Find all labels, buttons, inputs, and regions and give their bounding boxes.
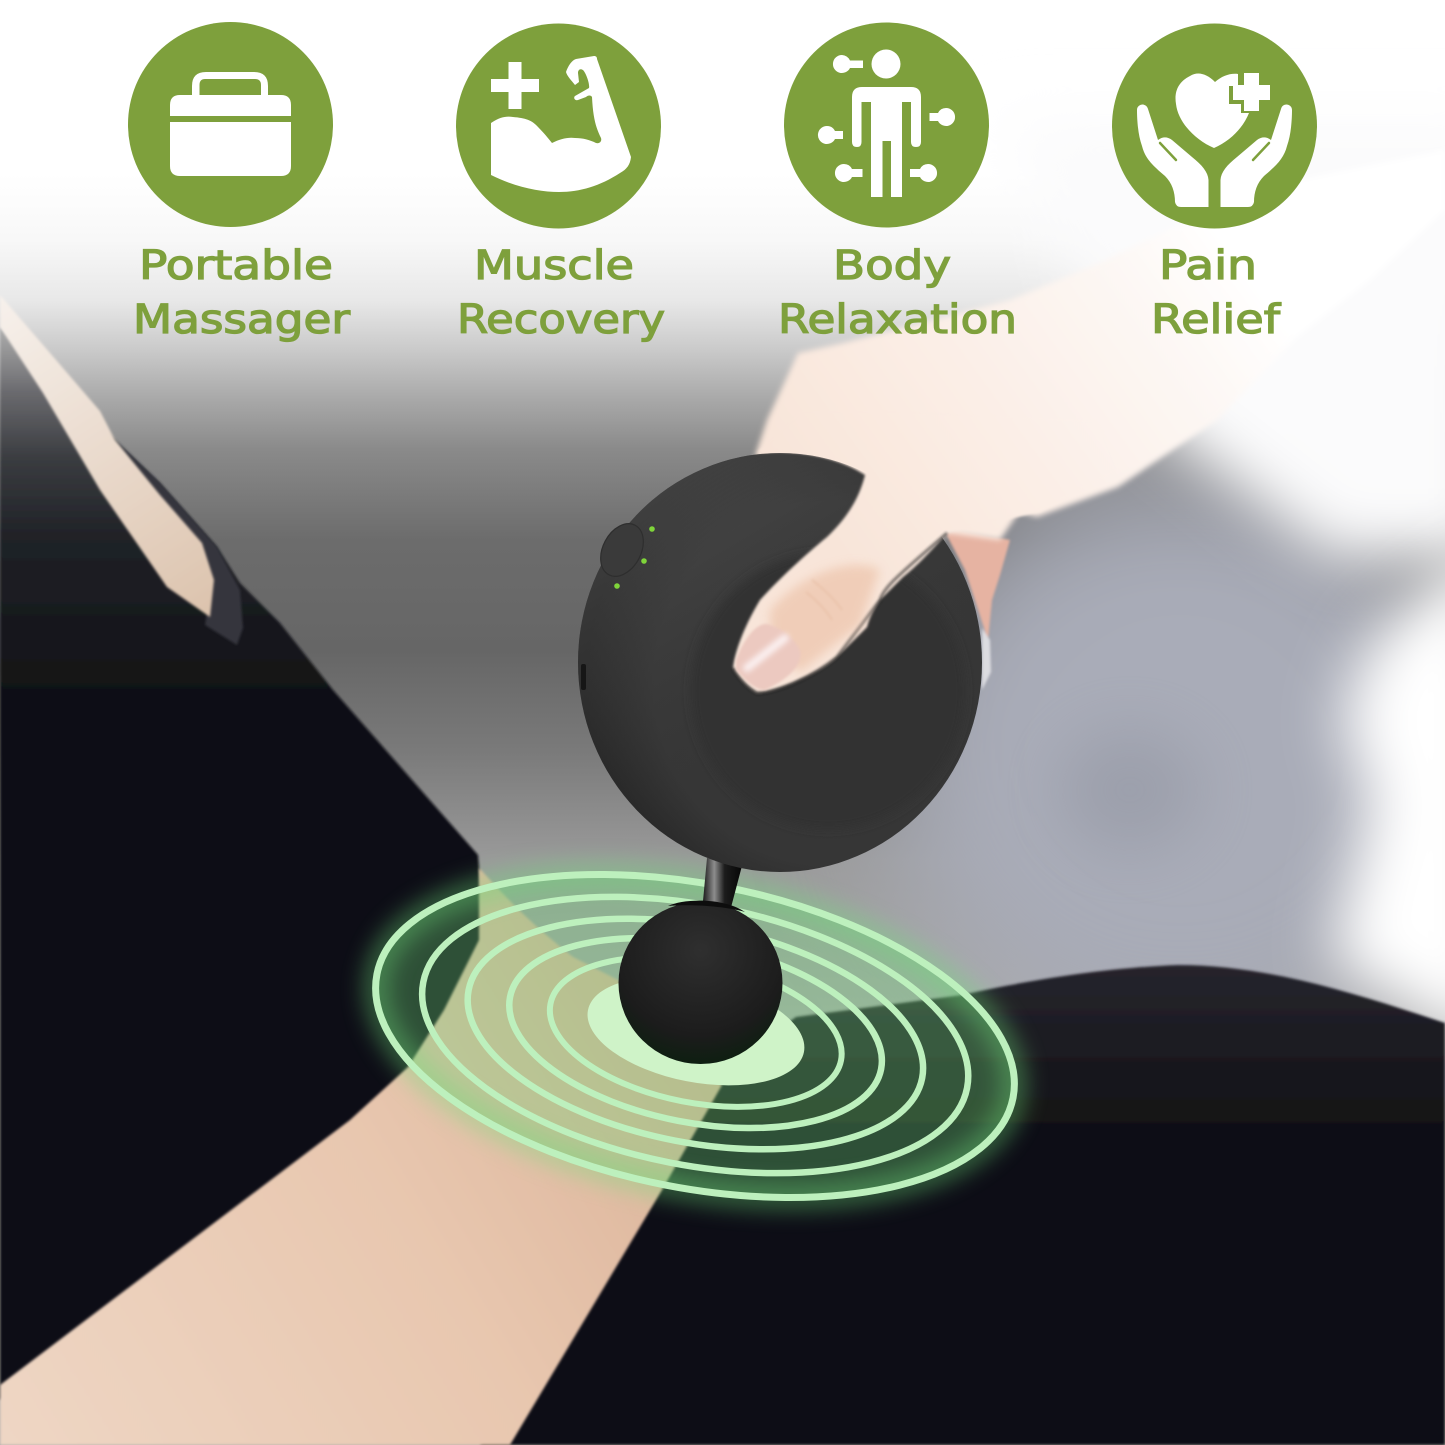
LED 3 bbox=[614, 583, 620, 589]
ring 3 bbox=[448, 883, 943, 1185]
hand back fading into white bbox=[756, 150, 1445, 600]
label: Portable Massager: Massager bbox=[133, 297, 351, 343]
massage ball head bbox=[618, 901, 782, 1064]
left hand crease bbox=[1160, 143, 1176, 160]
label: Body Relaxation bbox=[778, 243, 1017, 343]
inner darker disc bbox=[691, 553, 965, 829]
forearm bbox=[0, 868, 722, 1445]
thumb and palm over the device bbox=[733, 410, 1120, 693]
massager shaft bbox=[702, 858, 743, 915]
plus bbox=[1233, 73, 1270, 111]
tinted ring interior bbox=[348, 825, 1042, 1247]
LED 2 bbox=[641, 558, 647, 564]
black shirt on the left bbox=[0, 327, 490, 1400]
thumb shadow bbox=[733, 533, 947, 693]
sleeve fold bbox=[115, 440, 243, 645]
node right bbox=[930, 108, 955, 126]
nail highlight bbox=[747, 638, 785, 668]
label: Body Relaxation: Relaxation bbox=[778, 297, 1017, 343]
thumbnail bbox=[736, 624, 800, 690]
ring 5 bbox=[537, 935, 854, 1130]
black trousers lower right bbox=[480, 965, 1445, 1445]
thumb skin tone bbox=[770, 565, 880, 672]
left hand bbox=[1137, 105, 1208, 207]
label: Portable Massager bbox=[133, 243, 351, 343]
label: Body Relaxation: Body bbox=[833, 243, 951, 289]
label: Pain Relief: Pain bbox=[1159, 243, 1257, 289]
LED 1 bbox=[649, 526, 655, 532]
massager body bbox=[578, 453, 982, 872]
side slot bbox=[581, 664, 586, 690]
label: Muscle Recovery: Recovery bbox=[457, 297, 665, 343]
right hand bbox=[1220, 105, 1292, 207]
thumb crease bbox=[806, 580, 842, 620]
ring 4 bbox=[493, 909, 898, 1157]
right hand crease bbox=[1253, 143, 1269, 160]
heart bbox=[1176, 74, 1249, 148]
power button bbox=[592, 516, 652, 584]
icon: pain relief heart in hands bbox=[1112, 24, 1317, 228]
node left bbox=[818, 126, 843, 144]
icon: muscle recovery arm bbox=[456, 24, 661, 228]
label: Muscle Recovery bbox=[457, 243, 665, 343]
label: Muscle Recovery: Muscle bbox=[474, 243, 634, 289]
shoulder skin strip bbox=[0, 295, 214, 617]
ring glow bbox=[348, 825, 1042, 1247]
icon: portable massager case bbox=[128, 22, 333, 227]
label: Pain Relief: Relief bbox=[1151, 297, 1281, 343]
node bottom left bbox=[835, 164, 862, 182]
vibration rings bbox=[348, 825, 1042, 1247]
label: Portable Massager: Portable bbox=[139, 243, 333, 289]
node bottom right bbox=[910, 164, 937, 182]
label: Pain Relief bbox=[1151, 243, 1281, 343]
icon: body relaxation figure bbox=[784, 22, 989, 228]
fingers behind device bbox=[945, 530, 1010, 690]
ring 1 bbox=[348, 825, 1042, 1247]
node top left bbox=[833, 55, 863, 73]
center spot bbox=[578, 960, 814, 1102]
ring 2 bbox=[398, 855, 992, 1215]
